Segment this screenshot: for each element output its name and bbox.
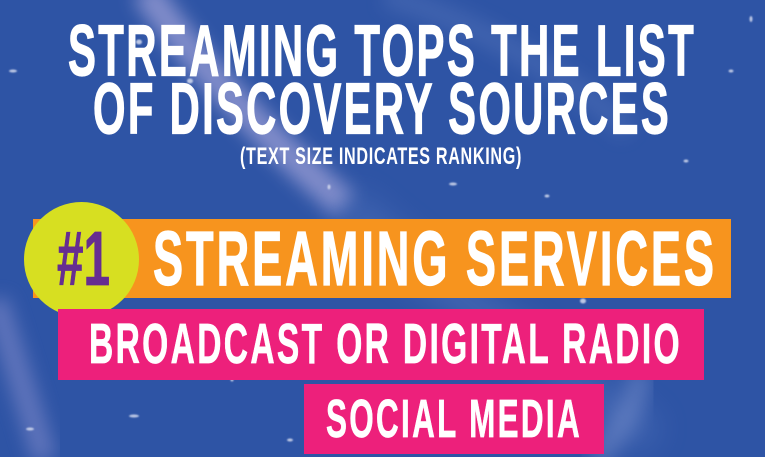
- ranking bar: social media: [304, 384, 604, 454]
- title: [68, 12, 696, 150]
- ranking bar: social media: SOCIAL MEDIA: [326, 389, 582, 449]
- badge: number one: [24, 202, 139, 317]
- subtitle: (TEXT SIZE INDICATES RANKING): [240, 143, 522, 170]
- badge: number one: #1: [57, 216, 110, 302]
